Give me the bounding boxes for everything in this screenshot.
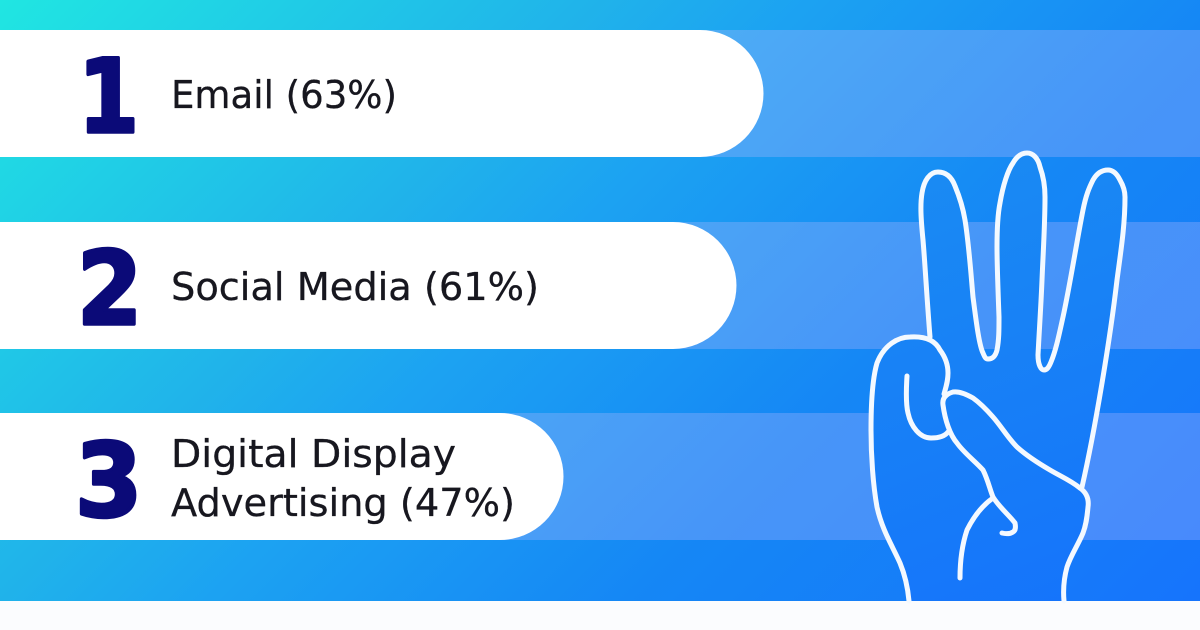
- icon: hand showing three fingers: [871, 153, 1125, 601]
- light band 3: [0, 413, 1200, 540]
- palm crease: [960, 498, 993, 578]
- label: Digital Display Advertising: [171, 432, 515, 525]
- finger outline: [921, 153, 1125, 487]
- line 1: Digital Display: [171, 432, 456, 476]
- palm and thumb outline: [871, 337, 1088, 601]
- pill 2: [0, 222, 736, 349]
- number 3: 3: [75, 423, 142, 541]
- panel: rank 3: [0, 413, 564, 541]
- thumb crease: [906, 376, 948, 438]
- footer strip: [0, 601, 1200, 630]
- light band 1: [0, 30, 1200, 157]
- hand body fill: [871, 153, 1125, 601]
- pill 3: [0, 413, 564, 540]
- pill 1: [0, 30, 763, 157]
- number 2: 2: [77, 230, 142, 349]
- panel: rank 1: [0, 30, 763, 157]
- panel: rank 2: [0, 222, 736, 349]
- light band 2: [0, 222, 1200, 349]
- label: Email: Email (63%): [171, 73, 397, 117]
- number 1: 1: [78, 39, 139, 157]
- curled finger: [943, 392, 1080, 534]
- label: Social Media: Social Media (61%): [171, 265, 539, 309]
- line 2: Advertising (47%): [171, 481, 515, 525]
